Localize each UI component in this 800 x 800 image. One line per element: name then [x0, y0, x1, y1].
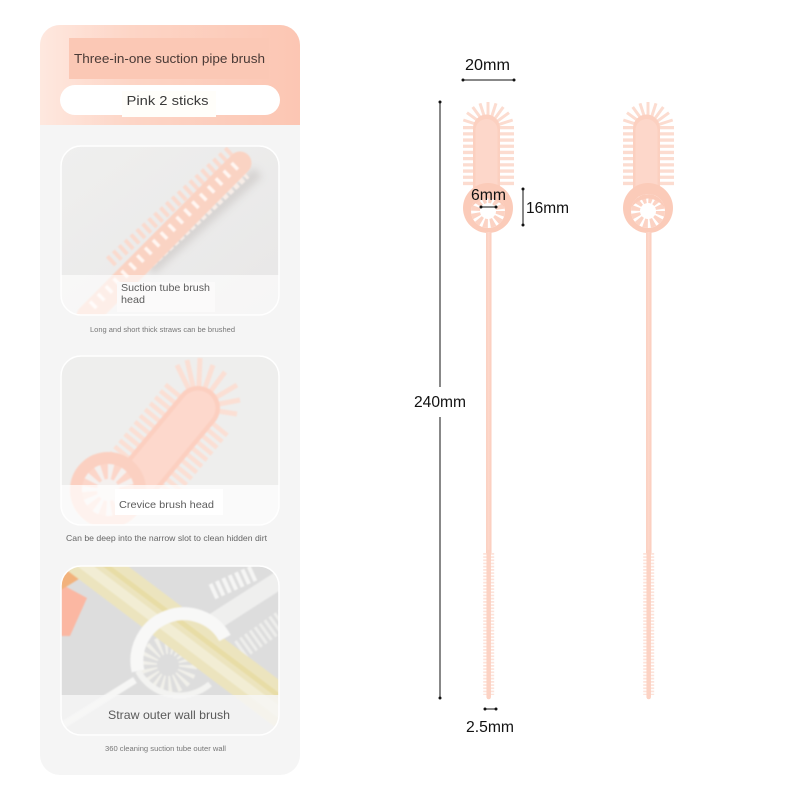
caption overlay — [61, 275, 279, 315]
caption: card 1: Long and short thick straws can be brushed — [90, 327, 235, 334]
subtitle pill: Pink 2 sticks — [126, 93, 209, 108]
caption overlay — [61, 485, 279, 525]
caption: card 2: Can be deep into the narrow slot to clean hidden dirt — [66, 533, 268, 543]
subtitle pill — [60, 85, 280, 117]
dimension: 240mm length: 240mm — [414, 394, 466, 411]
ring — [463, 183, 513, 233]
panel: product sidebar — [40, 25, 300, 775]
card: crevice brush head: Crevice brush head — [119, 499, 214, 511]
top fan bristles — [463, 102, 513, 128]
dimension: 16mm ring — [522, 188, 569, 226]
card: straw outer wall brush: Straw outer wall brush — [108, 708, 230, 722]
card: suction tube brush head: Suction tube brush — [121, 282, 210, 294]
dimension: 20mm width — [462, 57, 516, 82]
pill head — [473, 114, 500, 190]
card: suction tube brush head — [61, 146, 279, 316]
card: straw outer wall brush — [60, 566, 280, 736]
dimension: 6mm hole: 6mm — [471, 187, 506, 204]
dimension: 2.5mm tip: 2.5mm — [466, 719, 514, 736]
dimension: 240mm length — [414, 100, 466, 700]
lower bristled tip — [483, 553, 494, 695]
caption overlay — [61, 695, 279, 735]
header band — [40, 25, 300, 125]
stem — [486, 232, 492, 554]
side bristles — [463, 126, 514, 186]
card: crevice brush head — [61, 356, 279, 525]
dimension: 20mm width: 20mm — [465, 57, 510, 74]
card: suction tube brush head: head — [121, 294, 145, 306]
dimension: 16mm ring: 16mm — [526, 200, 569, 217]
title: Three-in-one suction pipe brush — [74, 51, 265, 66]
dimension: 2.5mm tip — [466, 708, 514, 736]
product: second brush — [623, 102, 673, 697]
product: brush with dimensions — [463, 102, 513, 697]
caption: card 3: 360 cleaning suction tube outer wall — [105, 746, 226, 753]
